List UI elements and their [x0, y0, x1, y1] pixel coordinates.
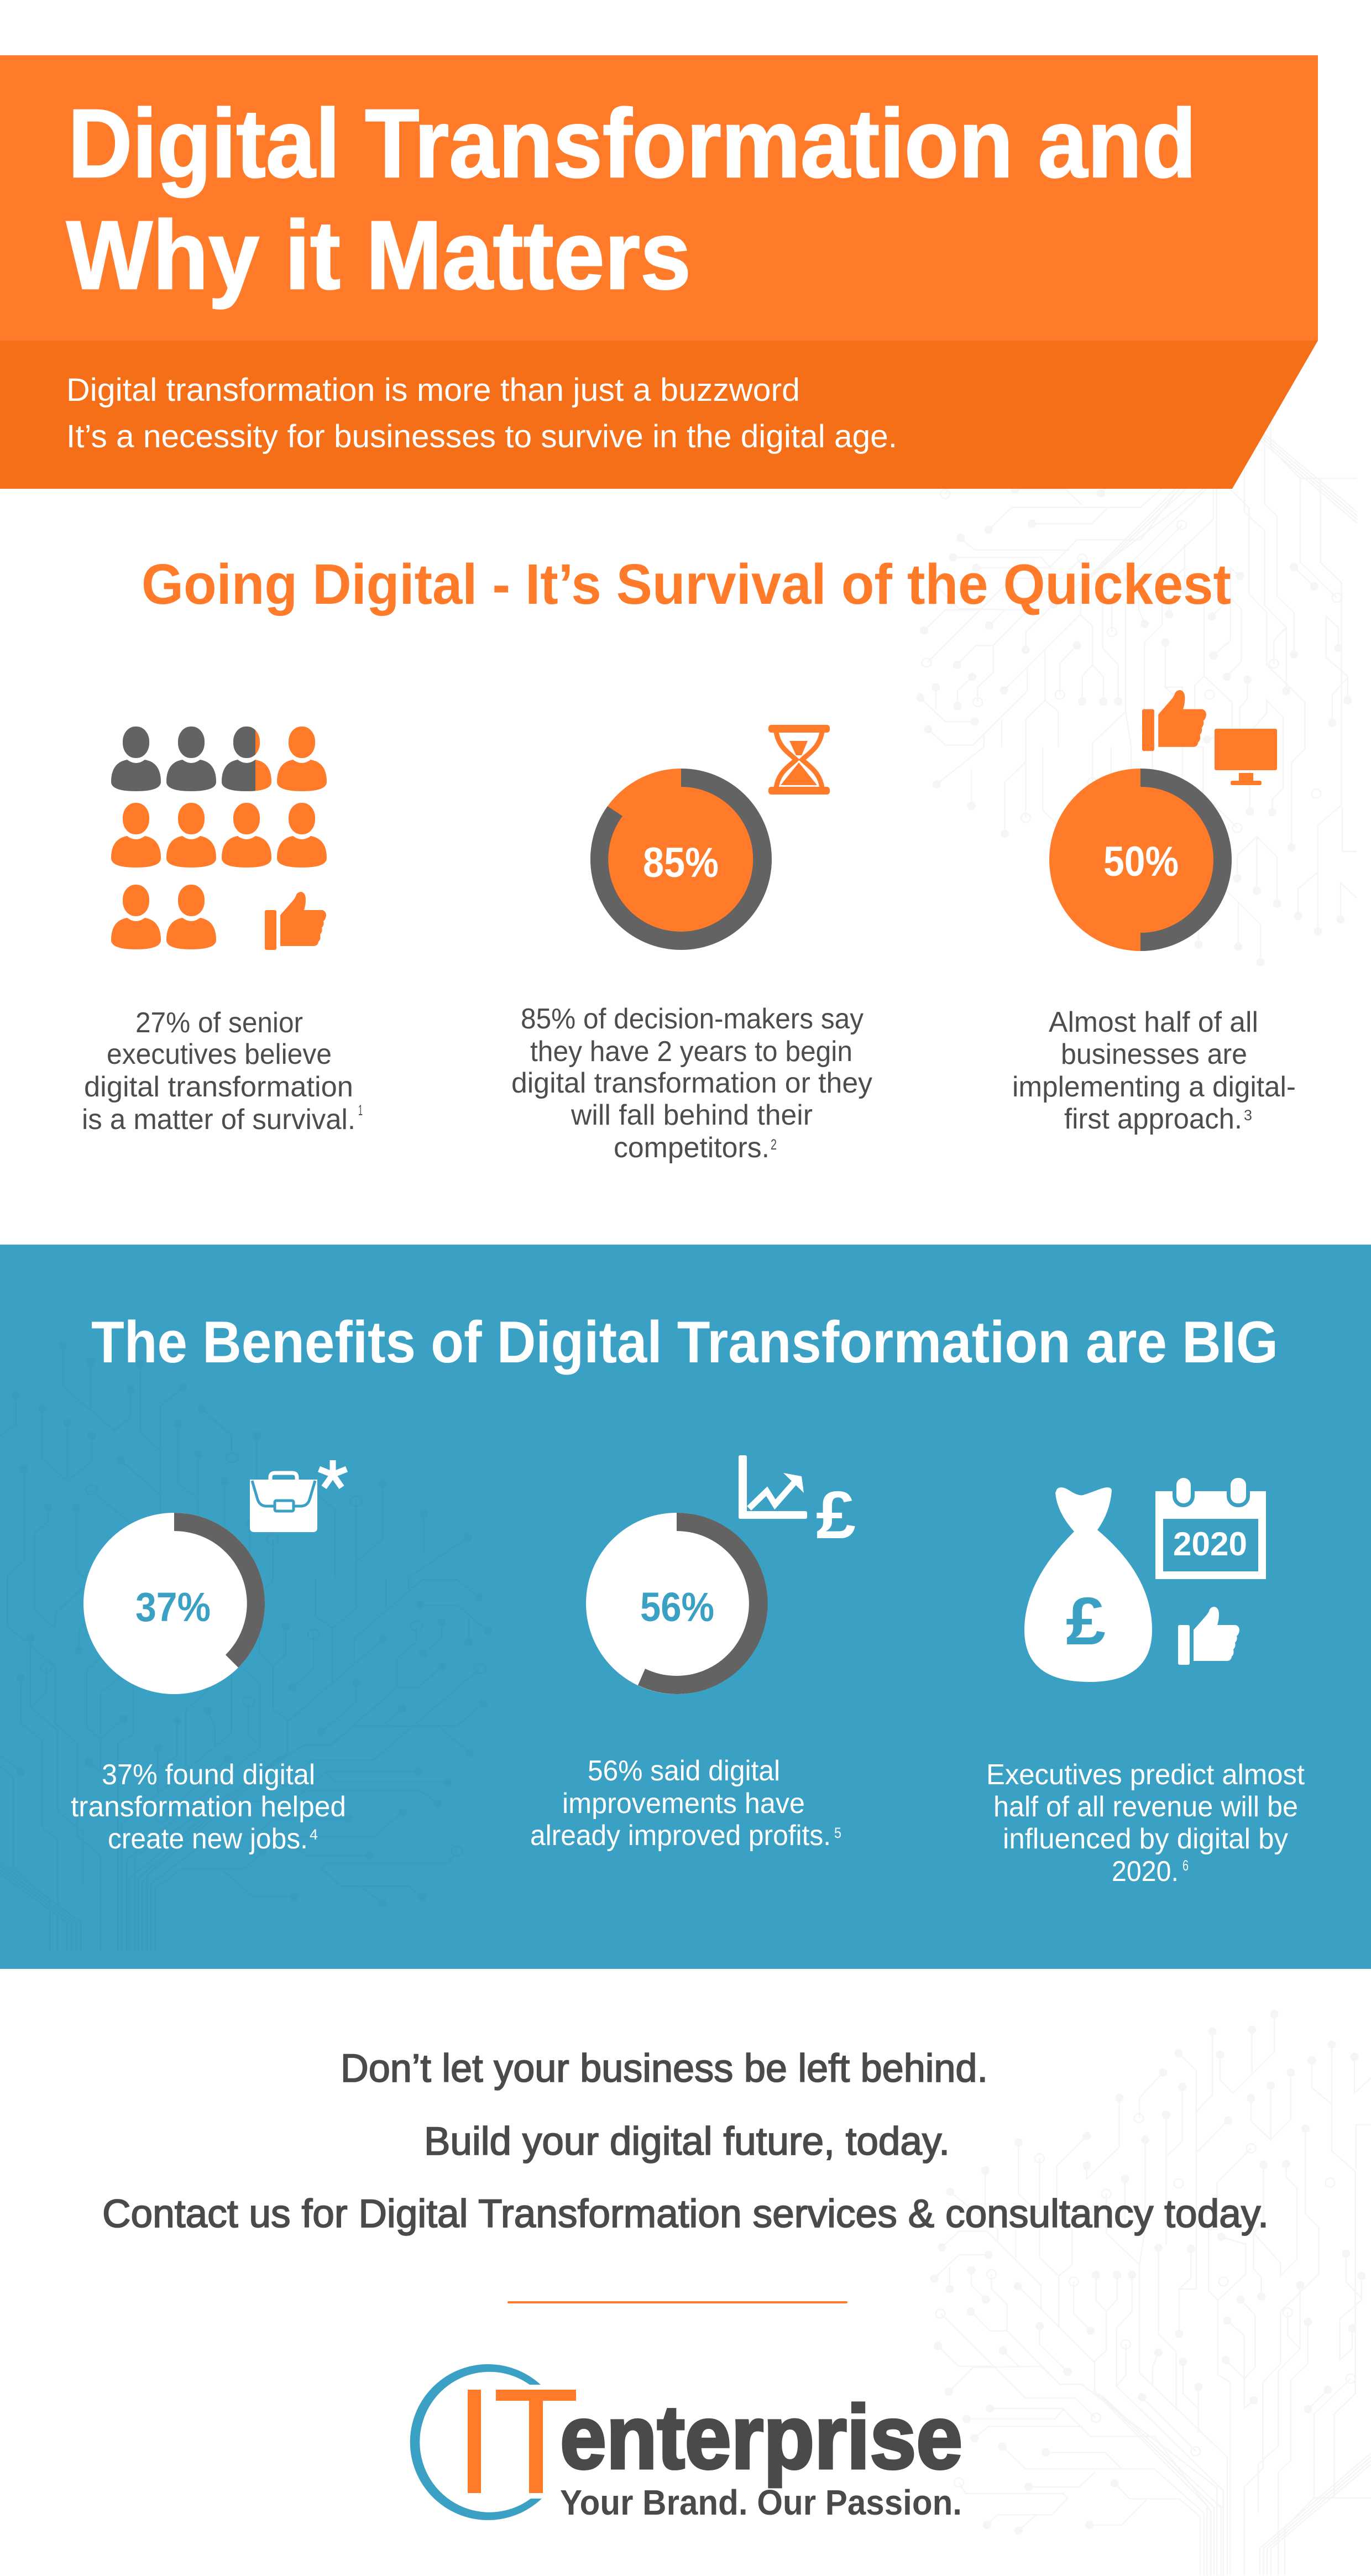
icon: calendar 2020: 2020: [1173, 1525, 1247, 1563]
header subtitle panel: [0, 341, 1318, 489]
logo tagline: Your Brand. Our Passion.: [560, 2483, 962, 2522]
call to action text: Build your digital future, today.: [424, 2120, 950, 2164]
donut: 56 percent: [586, 1513, 768, 1694]
stat: 37 percent new jobs: [71, 1460, 347, 1855]
header top panel: [0, 55, 1318, 341]
text: 27 percent caption: is a matter of survival.: [82, 1104, 355, 1136]
text: 37 percent caption: [71, 1759, 346, 1855]
text: 50 percent caption: implementing a digital-: [1012, 1071, 1296, 1103]
text: 85 percent caption: 85% of decision-makers say: [521, 1003, 864, 1035]
stat: 27 percent of executives: [82, 727, 363, 1136]
icon: monitor: [1215, 729, 1277, 785]
text: 50 percent caption: 3: [1244, 1107, 1252, 1124]
text: 56 percent caption: already improved profits.: [530, 1820, 831, 1852]
icon: thumbs up: [265, 892, 326, 950]
icon: money bag: £: [1066, 1584, 1106, 1659]
call to action text: Don’t let your business be left behind.: [341, 2047, 988, 2091]
text: 37 percent caption: create new jobs.: [108, 1823, 308, 1855]
icon: rising chart: [739, 1455, 807, 1519]
logo wordmark: enterprise: [560, 2386, 962, 2488]
stat: 85 percent of decision makers: [511, 725, 872, 1164]
logo: IT enterprise: [410, 2364, 962, 2522]
logo letters IT: [468, 2390, 576, 2493]
text: 56 percent caption: [530, 1755, 841, 1852]
title: Why it Matters: [66, 201, 691, 310]
title: [66, 90, 1196, 310]
stat: 50 percent of businesses: [1012, 690, 1296, 1135]
subtitle text: It’s a necessity for businesses to survive in the digital age.: [66, 419, 897, 454]
text: 85 percent caption: digital transformation or they: [511, 1067, 872, 1099]
stat: revenue by 2020: [986, 1474, 1305, 1888]
text: revenue caption: half of all revenue will be: [993, 1791, 1298, 1823]
text: 37 percent caption: 4: [310, 1826, 318, 1843]
text: 85 percent caption: they have 2 years to begin: [530, 1036, 852, 1068]
text: 50 percent caption: businesses are: [1061, 1038, 1247, 1070]
subtitle text: Digital transformation is more than just a buzzword: [66, 372, 800, 408]
text: revenue caption: 6: [1182, 1857, 1189, 1874]
text: 85 percent caption: will fall behind their: [571, 1099, 813, 1131]
divider line: [507, 2301, 847, 2303]
text: 37 percent caption: 37% found digital: [102, 1759, 315, 1791]
icon: money bag: [1024, 1487, 1152, 1682]
text: revenue caption: influenced by digital by: [1003, 1823, 1288, 1855]
text: 85 percent caption: 2: [771, 1136, 777, 1153]
text: 85 percent caption: [511, 1003, 872, 1164]
icon: pound sign: £: [816, 1477, 856, 1553]
donut: 37 percent: [83, 1513, 265, 1694]
heading: benefits: The Benefits of Digital Transformation are BIG: [91, 1309, 1278, 1375]
text: 85 percent caption: competitors.: [614, 1132, 770, 1164]
icon: briefcase: [250, 1473, 317, 1532]
text: 27 percent caption: 1: [358, 1102, 363, 1119]
call to action text: [102, 2047, 1269, 2236]
icon: people grid: [111, 727, 327, 949]
donut: 85 percent: 85%: [643, 839, 719, 886]
donut: 85 percent: [590, 769, 772, 950]
subtitle text: [66, 372, 897, 454]
header banner: [0, 55, 1318, 489]
donut: 50 percent: 50%: [1103, 838, 1179, 885]
icon: asterisk: [319, 1460, 347, 1487]
icon: thumbs up: [1142, 690, 1206, 751]
text: 56 percent caption: improvements have: [562, 1788, 805, 1820]
panel: benefits: [0, 1245, 1371, 1969]
donut: 50 percent: [1049, 769, 1232, 951]
heading: going digital: Going Digital - It’s Survival of the Quickest: [142, 552, 1231, 616]
text: 27 percent caption: 27% of senior: [135, 1007, 303, 1039]
text: 27 percent caption: digital transformation: [84, 1071, 353, 1103]
text: revenue caption: [986, 1759, 1305, 1888]
stat: 56 percent profits: [530, 1455, 856, 1852]
icon: calendar 2020: [1155, 1474, 1266, 1579]
icon: thumbs up: [1178, 1607, 1239, 1665]
text: 56 percent caption: 56% said digital: [588, 1755, 780, 1787]
logo ring: [410, 2364, 542, 2520]
text: revenue caption: 2020.: [1112, 1856, 1179, 1888]
call to action text: Contact us for Digital Transformation services & consultancy today.: [102, 2192, 1269, 2236]
text: revenue caption: Executives predict almost: [986, 1759, 1305, 1791]
donut: 56 percent: 56%: [640, 1584, 714, 1630]
text: 50 percent caption: Almost half of all: [1049, 1006, 1258, 1038]
text: 27 percent caption: [82, 1007, 363, 1136]
text: 50 percent caption: [1012, 1006, 1296, 1135]
title: Digital Transformation and: [68, 90, 1196, 198]
text: 50 percent caption: first approach.: [1064, 1103, 1242, 1135]
icon: hourglass: [768, 725, 830, 795]
text: 37 percent caption: transformation helped: [71, 1791, 346, 1823]
text: 27 percent caption: executives believe: [107, 1038, 332, 1070]
donut: 37 percent: 37%: [135, 1584, 211, 1630]
text: 56 percent caption: 5: [834, 1825, 841, 1841]
